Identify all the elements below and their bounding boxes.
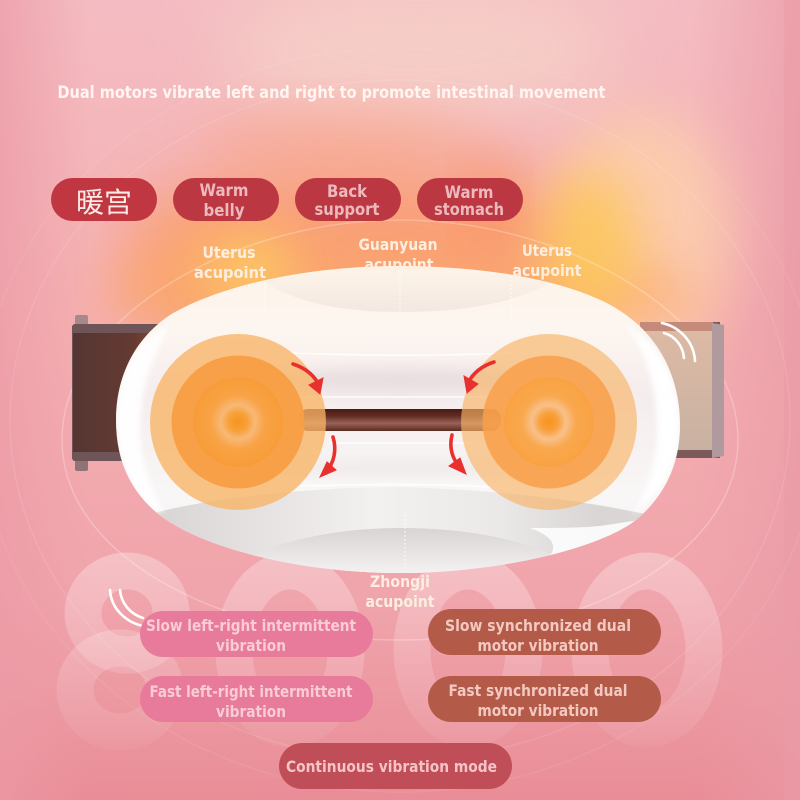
mode: continuous [279,743,512,789]
label: guanyuan acupoint: acupoint [364,255,434,274]
mode: fast left-right: vibration [216,702,286,721]
heat glow [100,110,730,360]
label: right uterus acupoint: Uterus [522,241,572,260]
lower-right swoosh [530,520,635,555]
label: right uterus acupoint [512,241,582,280]
label: zhongji acupoint [366,572,435,611]
label: left uterus acupoint: Uterus [202,243,256,262]
label: left uterus acupoint: acupoint [194,263,266,282]
mode: slow left-right: vibration [216,636,286,655]
label: left uterus acupoint [194,243,266,282]
tag: back support [295,178,401,221]
tag: back support: support [314,200,380,219]
middle shading [310,366,476,392]
mode: continuous: Continuous vibration mode [286,757,497,776]
mode: fast synchronized: motor vibration [478,701,598,720]
icon: red rotation arrows [293,362,494,477]
mode: fast left-right: Fast left-right intermittent [150,682,353,701]
lower dish [250,528,552,575]
tag: 暖宫: 暖宫 [76,187,132,218]
tag: warm belly: belly [204,201,245,220]
mode: slow left-right [140,611,373,657]
tag: warm belly: Warm [200,181,248,200]
tag: 暖宫 [51,178,157,221]
label: guanyuan acupoint: Guanyuan [358,235,438,254]
label: guanyuan acupoint [358,235,438,274]
right strap [640,322,724,458]
title: Dual motors vibrate left and right to promote intestinal movement [58,83,606,102]
icon: vibration waves upper right [662,323,695,361]
right vibration motor [461,334,637,510]
left strap [72,315,184,471]
tag: back support: Back [327,182,368,201]
label: zhongji acupoint: acupoint [366,592,435,611]
tag: warm stomach: Warm [444,183,494,202]
mode: fast left-right [140,676,373,722]
large background number 8000 [75,571,704,732]
mode: slow synchronized: motor vibration [478,636,598,655]
rim highlights [116,330,165,513]
left vibration motor [150,334,326,510]
label: right uterus acupoint: acupoint [512,261,582,280]
slot [299,409,501,431]
tag: warm stomach [417,178,523,221]
tag: warm stomach: stomach [434,200,504,219]
label: zhongji acupoint: Zhongji [370,572,430,591]
upper dish [296,296,516,312]
mode: slow left-right: Slow left-right intermittent [146,616,356,635]
mode: fast synchronized [428,676,661,722]
icon: vibration waves lower left [110,590,143,626]
lower grey region [156,488,643,573]
tag: warm belly [173,178,279,221]
dotted leader lines [265,274,511,572]
mode: slow synchronized [428,609,661,655]
mode: slow synchronized: Slow synchronized dual [445,616,631,635]
massager body [110,260,690,580]
mode: fast synchronized: Fast synchronized dual [448,681,628,700]
